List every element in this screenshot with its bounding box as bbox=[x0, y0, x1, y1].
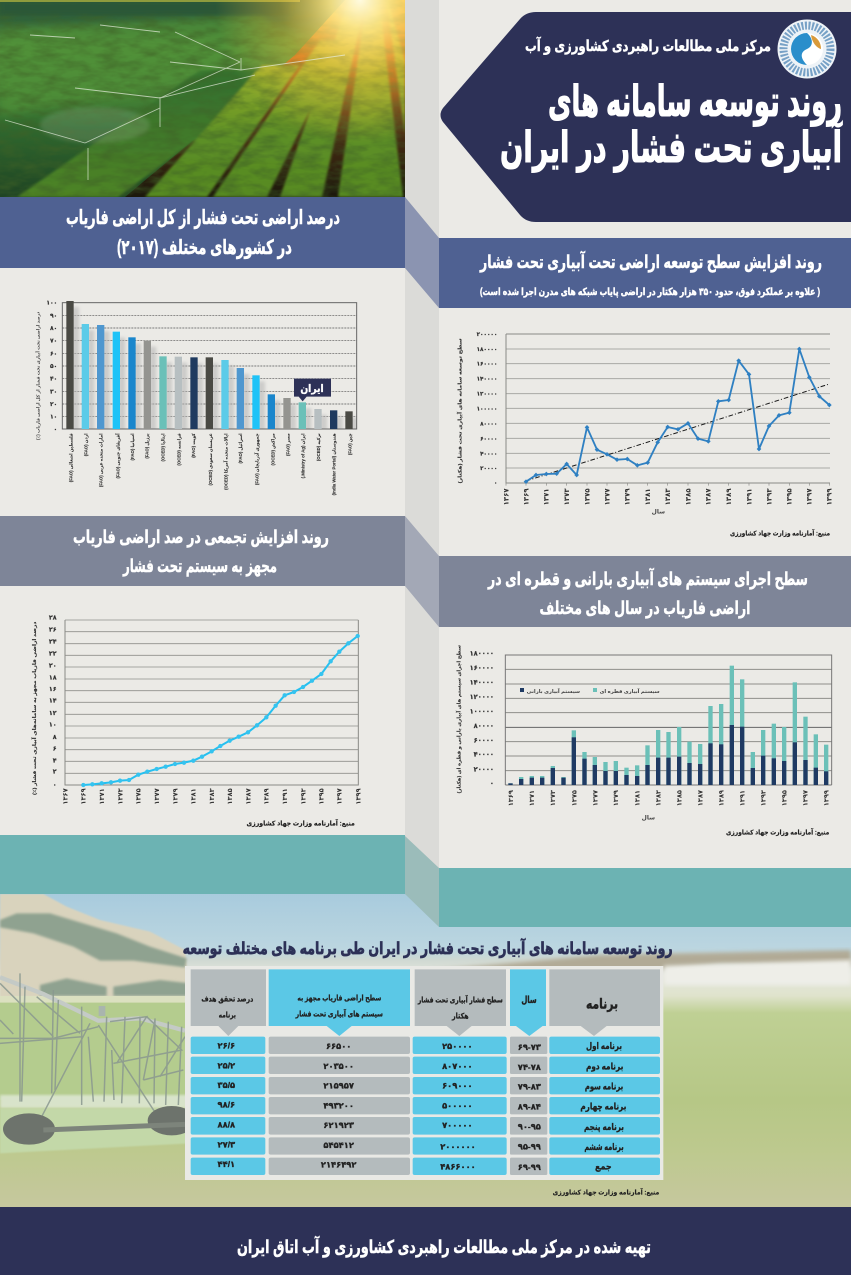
x axis years: ۱۳۷۷ bbox=[154, 788, 161, 805]
row: fourth program: ۸۹-۸۴ bbox=[518, 1101, 541, 1111]
y axis values: ۱۰۰ bbox=[46, 301, 57, 307]
fold connector 2 bbox=[405, 516, 439, 627]
source: منبع: آمارنامه وزارت جهاد کشاورزی bbox=[246, 819, 355, 828]
y axis values: ۱۸۰۰۰۰ bbox=[477, 347, 497, 353]
country labels: مراکش (OCED) bbox=[271, 433, 276, 465]
x axis years: ۱۳۶۹ bbox=[523, 488, 530, 505]
x axis years: ۱۳۹۷ bbox=[803, 790, 810, 806]
header: pressurized area bbox=[415, 969, 506, 1036]
x axis years: ۱۳۹۹ bbox=[356, 788, 363, 805]
heading: share of pressurized land by country line 2: در کشورهای مختلف (۲۰۱۷) bbox=[117, 237, 292, 259]
fold connector 1 bbox=[405, 197, 439, 308]
country labels: ترکیه (OCED) bbox=[316, 433, 321, 461]
country labels: فلسطین اشغالی (FAO) bbox=[69, 433, 74, 482]
y axis values: ۱۰۰۰۰۰ bbox=[470, 708, 494, 715]
row: fifth program: ۶۲۱۹۲۳ bbox=[323, 1120, 354, 1130]
x axis years: ۱۳۹۳ bbox=[761, 790, 768, 806]
country labels: اردن (FAO) bbox=[83, 433, 88, 456]
row: total: ۴۴/۱ bbox=[218, 1159, 235, 1169]
x axis years: ۱۳۷۳ bbox=[564, 488, 571, 505]
header: achievement: برنامه bbox=[219, 1010, 236, 1019]
row: fifth program: ۸۸/۸ bbox=[218, 1120, 235, 1130]
country labels bbox=[69, 433, 352, 495]
y axis values bbox=[46, 301, 57, 433]
y axis values: ۵۰ bbox=[50, 364, 57, 370]
row: sixth program: ۹۵-۹۹ bbox=[518, 1141, 541, 1151]
row: fifth program: برنامه پنجم bbox=[584, 1122, 624, 1133]
data line bbox=[83, 636, 358, 785]
x axis years: ۱۳۸۳ bbox=[665, 488, 672, 505]
y axis values: ۴۰ bbox=[50, 377, 57, 383]
x axis years: ۱۳۸۱ bbox=[634, 790, 641, 806]
country labels: جمهوری آذربایجان (FAO) bbox=[255, 433, 260, 485]
y axis values: ۲۰ bbox=[49, 663, 57, 670]
x axis title: سال bbox=[642, 814, 655, 821]
header: pressurized area: هکتار bbox=[451, 1011, 469, 1020]
y axis title: درصد اراضی فاریاب مجهز به سامانه‌های آبیاری تحت فشار (٪) bbox=[30, 621, 38, 795]
y axis values: ۱۸۰۰۰۰ bbox=[470, 651, 494, 658]
country labels: چین (FAO) bbox=[347, 433, 352, 455]
left header band 1 bbox=[0, 197, 405, 268]
y axis values: ۰ bbox=[490, 781, 494, 788]
header: achievement: درصد تحقق هدف bbox=[201, 994, 253, 1003]
row: total: ۶۹-۹۹ bbox=[518, 1162, 541, 1172]
header: equipped land: سطح اراضی فاریاب مجهز به bbox=[297, 993, 381, 1002]
header: achievement bbox=[191, 969, 266, 1036]
x axis years: ۱۳۶۷ bbox=[62, 788, 69, 805]
x axis years bbox=[508, 790, 831, 806]
x axis years: ۱۳۷۵ bbox=[584, 488, 591, 505]
right header band 1 bbox=[439, 238, 851, 308]
country labels: ایالات متحده آمریکا (OCED) bbox=[223, 433, 228, 490]
right header band 2 bbox=[439, 556, 851, 627]
row: first program: ۶۹-۷۳ bbox=[518, 1042, 541, 1052]
source: منبع: آمارنامه وزارت جهاد کشاورزی bbox=[726, 827, 829, 836]
y axis values: ۱۴۰۰۰۰ bbox=[477, 377, 497, 383]
row: second program: ۷۴-۷۸ bbox=[518, 1062, 541, 1072]
x axis years: ۱۳۹۵ bbox=[319, 788, 326, 805]
header: program: برنامه bbox=[586, 996, 618, 1013]
header: equipped land bbox=[269, 969, 410, 1036]
right teal band bbox=[439, 868, 851, 927]
x axis years: ۱۳۷۱ bbox=[99, 788, 106, 805]
Iran callout: ایران bbox=[300, 383, 324, 395]
row: second program: ۲۰۳۵۰۰ bbox=[323, 1061, 354, 1071]
row: first program: ۲۵۰۰۰۰ bbox=[442, 1041, 473, 1051]
y axis values: ۳۰ bbox=[50, 388, 57, 395]
y axis values: ۴ bbox=[53, 757, 57, 764]
country labels: کویت (FAO) bbox=[191, 433, 196, 458]
y axis values: ۰ bbox=[53, 781, 57, 788]
y axis values: ۶ bbox=[53, 746, 57, 753]
y axis values: ۲۰ bbox=[50, 402, 57, 408]
x axis years: ۱۳۸۵ bbox=[227, 788, 234, 805]
row: sixth program: ۵۴۵۴۱۲ bbox=[323, 1140, 354, 1150]
header: year bbox=[510, 969, 546, 1036]
footer text: تهیه شده در مرکز ملی مطالعات راهبردی کشاورزی و آب اتاق ایران bbox=[237, 1235, 651, 1258]
gutter between columns bbox=[405, 0, 439, 894]
legend: سیستم آبیاری قطره ای bbox=[600, 687, 660, 695]
heading: sprinkler and drip line 2: اراضی فاریاب در سال های مختلف bbox=[540, 598, 750, 618]
y axis values: ۱۸ bbox=[49, 674, 57, 681]
y axis values: ۶۰۰۰۰ bbox=[474, 737, 494, 744]
y axis values: ۱۶۰۰۰۰ bbox=[470, 665, 494, 672]
row: first program: ۲۶/۶ bbox=[218, 1040, 235, 1050]
row: second program: ۲۵/۲ bbox=[218, 1060, 235, 1070]
trend line bbox=[526, 384, 829, 481]
hillside and forest bbox=[0, 894, 190, 1153]
row: third program: ۳۵/۵ bbox=[218, 1080, 235, 1090]
x axis years: ۱۳۸۳ bbox=[209, 788, 216, 805]
x axis years: ۱۳۸۱ bbox=[191, 788, 198, 805]
y axis title: سطح توسعه سامانه های آبیاری تحت فشار (هکتار) bbox=[455, 338, 463, 483]
header: pressurized area: سطح فشار آبیاری تحت فشار bbox=[417, 994, 503, 1004]
row: first program: برنامه اول bbox=[586, 1041, 622, 1052]
footer bbox=[0, 1207, 851, 1275]
x axis years bbox=[503, 488, 834, 505]
x axis years: ۱۳۹۱ bbox=[739, 790, 746, 806]
x axis years: ۱۳۷۳ bbox=[550, 790, 557, 806]
y axis values: ۱۲۰۰۰۰ bbox=[470, 694, 494, 701]
left teal band bbox=[0, 835, 405, 894]
legend bbox=[520, 687, 660, 695]
legend: سیستم آبیاری بارانی bbox=[527, 687, 580, 695]
row: first program bbox=[191, 1037, 660, 1054]
x axis years: ۱۳۹۱ bbox=[746, 488, 753, 505]
x axis years: ۱۳۷۳ bbox=[117, 788, 124, 805]
line chart: cumulative percent of irrigated land bbox=[30, 615, 363, 828]
row: fourth program: ۹۸/۶ bbox=[218, 1100, 235, 1110]
row: fourth program: برنامه چهارم bbox=[580, 1102, 626, 1113]
Iran callout bbox=[294, 379, 331, 401]
y axis values: ۲۶ bbox=[49, 627, 57, 634]
x axis years: ۱۳۸۹ bbox=[726, 488, 733, 505]
logo bbox=[778, 20, 836, 78]
y axis values bbox=[49, 615, 57, 788]
x axis years: ۱۳۸۷ bbox=[245, 788, 252, 805]
sub heading note: ( علاوه بر عملکرد فوق، حدود ۳۵۰ هزار هکتار در اراضی پایاب شبکه های مدرن اجرا شده است) bbox=[480, 287, 820, 298]
source: منبع: آمارنامه وزارت جهاد کشاورزی bbox=[730, 528, 830, 537]
x axis years: ۱۳۷۷ bbox=[592, 790, 599, 806]
header: program bbox=[549, 969, 660, 1036]
row: third program: برنامه سوم bbox=[585, 1081, 623, 1092]
y axis values: ۱۰ bbox=[49, 722, 57, 729]
table background bbox=[185, 966, 663, 1180]
y axis title: سطح اجرای سیستم های آبیاری بارانی و قطره ای (هکتار) bbox=[455, 645, 463, 793]
x axis years bbox=[62, 788, 363, 805]
heading: cumulative increase line 1: روند افزایش تجمعی در صد اراضی فاریاب bbox=[73, 527, 329, 548]
row: total: ۴۸۶۶۰۰۰ bbox=[440, 1162, 476, 1172]
row: third program bbox=[191, 1077, 660, 1094]
row: third program: ۲۱۵۹۵۷ bbox=[323, 1081, 354, 1091]
row: sixth program: برنامه ششم bbox=[584, 1142, 624, 1153]
row: fifth program: ۷۰۰۰۰۰ bbox=[442, 1120, 473, 1130]
row: second program: برنامه دوم bbox=[586, 1062, 623, 1073]
x axis years: ۱۳۶۷ bbox=[503, 488, 510, 505]
x axis years: ۱۳۹۹ bbox=[827, 488, 834, 505]
x axis years: ۱۳۸۵ bbox=[676, 790, 683, 806]
y axis title: درصد اراضی تحت آبیاری تحت فشار از کل اراضی فاریاب (٪) bbox=[35, 311, 40, 440]
row: fifth program: ۹۰-۹۵ bbox=[518, 1121, 541, 1131]
y axis values: ۲۲ bbox=[49, 650, 57, 657]
country labels: اسرائیل (FAO) bbox=[238, 433, 243, 464]
x axis years: ۱۳۸۳ bbox=[655, 790, 662, 806]
pivot irrigation structure bbox=[0, 973, 196, 1145]
sprinkler irrigation series bbox=[508, 725, 828, 785]
x axis years: ۱۳۸۵ bbox=[685, 488, 692, 505]
x axis years: ۱۳۹۷ bbox=[337, 788, 344, 805]
y axis values: ۰ bbox=[54, 427, 57, 433]
y axis values: ۷۰ bbox=[50, 339, 57, 345]
header: year: سال bbox=[521, 995, 537, 1006]
row: sixth program: ۲۰۰۰۰۰۰ bbox=[440, 1141, 476, 1151]
x axis years: ۱۳۷۹ bbox=[625, 488, 632, 505]
y axis values: ۱۲۰۰۰۰ bbox=[477, 392, 497, 398]
bars bbox=[66, 301, 353, 429]
country labels: عربستان سعودی (OCED) bbox=[208, 433, 213, 486]
country labels: برزیل (FAO) bbox=[145, 433, 150, 459]
y axis values: ۸۰ bbox=[50, 326, 57, 332]
x axis years: ۱۳۸۷ bbox=[697, 790, 704, 806]
country labels: هندوستان (India Water Portal) bbox=[331, 433, 336, 495]
data line bbox=[526, 349, 829, 482]
heading: share of pressurized land by country line 1: درصد اراضی تحت فشار از کل اراضی فاریاب bbox=[66, 207, 340, 229]
drip irrigation series bbox=[508, 666, 828, 785]
x axis years: ۱۳۶۹ bbox=[81, 788, 88, 805]
x axis years: ۱۳۷۹ bbox=[613, 790, 620, 806]
title banner bbox=[440, 12, 851, 222]
x axis years: ۱۳۸۷ bbox=[706, 488, 713, 505]
row: first program: ۶۶۵۰۰ bbox=[326, 1041, 351, 1051]
photo: sprinkler irrigation field at sunset bbox=[0, 0, 405, 197]
country labels: ایران (Ministry of Ag.) bbox=[301, 433, 306, 478]
x axis years: ۱۳۹۹ bbox=[824, 790, 831, 806]
y axis values: ۲۰۰۰۰ bbox=[480, 466, 497, 472]
row: second program bbox=[191, 1057, 660, 1074]
row: fourth program: ۵۰۰۰۰۰ bbox=[442, 1100, 473, 1110]
table section bbox=[183, 937, 673, 1196]
left header band 2 bbox=[0, 516, 405, 586]
y axis values: ۱۲ bbox=[49, 710, 57, 717]
y axis values: ۱۰ bbox=[50, 415, 57, 421]
x axis years: ۱۳۹۷ bbox=[807, 488, 814, 505]
y axis values bbox=[477, 332, 497, 486]
y axis values: ۶۰ bbox=[50, 351, 57, 357]
y axis values: ۸۰۰۰۰ bbox=[474, 723, 494, 730]
y axis values: ۲۰۰۰۰۰ bbox=[477, 332, 497, 338]
y axis values: ۲۰۰۰۰ bbox=[474, 766, 494, 773]
row: total: ۲۱۴۶۴۹۲ bbox=[321, 1160, 356, 1170]
table title: روند توسعه سامانه های آبیاری تحت فشار در ایران طی برنامه های مختلف توسعه bbox=[183, 937, 673, 959]
x axis years: ۱۳۹۵ bbox=[782, 790, 789, 806]
country labels: فرانسه (OCED) bbox=[176, 433, 181, 466]
y axis values: ۴۰۰۰۰ bbox=[480, 451, 497, 457]
header: equipped land: سیستم های آبیاری تحت فشار bbox=[295, 1008, 383, 1018]
x axis years: ۱۳۹۱ bbox=[282, 788, 289, 805]
country labels: اسپانیا (FAO) bbox=[130, 433, 135, 460]
country labels: ایتالیا (OCED) bbox=[161, 433, 166, 461]
row: total: جمع bbox=[595, 1161, 612, 1172]
bar chart: pressurized share by country bbox=[35, 301, 358, 495]
x axis years: ۱۳۹۳ bbox=[300, 788, 307, 805]
y axis values: ۰ bbox=[494, 480, 497, 486]
row: second program: ۸۰۷۰۰۰ bbox=[442, 1061, 473, 1071]
y axis values: ۱۶ bbox=[49, 686, 57, 693]
x axis years: ۱۳۷۱ bbox=[529, 790, 536, 806]
source: منبع: آمارنامه وزارت جهاد کشاورزی bbox=[553, 1187, 659, 1196]
y axis values: ۲ bbox=[53, 768, 57, 775]
y axis values: ۲۴ bbox=[49, 639, 57, 646]
country labels: امارات متحده عربی (FAO) bbox=[99, 433, 104, 487]
row: sixth program bbox=[191, 1137, 660, 1155]
x axis years: ۱۳۷۵ bbox=[571, 790, 578, 806]
x axis title: سال bbox=[652, 509, 665, 516]
x axis years: ۱۳۸۱ bbox=[645, 488, 652, 505]
organization name: مرکز ملی مطالعات راهبردی کشاورزی و آب bbox=[525, 37, 771, 55]
row: third program: ۷۹-۸۳ bbox=[518, 1082, 541, 1092]
x axis years: ۱۳۷۵ bbox=[136, 788, 143, 805]
y axis values: ۱۴۰۰۰۰ bbox=[470, 680, 494, 687]
x axis years: ۱۳۹۵ bbox=[787, 488, 794, 505]
line chart: developed pressurized area per year bbox=[455, 332, 834, 537]
y axis values: ۲۸ bbox=[49, 615, 57, 622]
row: fourth program bbox=[191, 1097, 660, 1114]
x axis years: ۱۳۷۱ bbox=[544, 488, 551, 505]
y axis values: ۹۰ bbox=[50, 313, 57, 319]
x axis years: ۱۳۸۹ bbox=[264, 788, 271, 805]
country labels: آفریقای جنوبی (FAO) bbox=[115, 433, 120, 478]
x axis years: ۱۳۸۹ bbox=[718, 790, 725, 806]
y axis values: ۶۰۰۰۰ bbox=[480, 436, 497, 442]
y axis values: ۱۴ bbox=[49, 698, 57, 705]
row: third program: ۶۰۹۰۰۰ bbox=[442, 1081, 473, 1091]
y axis values: ۱۰۰۰۰۰ bbox=[477, 406, 497, 412]
row: sixth program: ۲۷/۳ bbox=[218, 1139, 235, 1149]
x axis years: ۱۳۹۳ bbox=[766, 488, 773, 505]
stacked bar chart: sprinkler and drip area bbox=[455, 645, 832, 836]
y axis values bbox=[470, 651, 494, 788]
row: total bbox=[191, 1158, 660, 1175]
teal fold connector bbox=[405, 836, 439, 927]
y axis values: ۸۰۰۰۰ bbox=[480, 421, 497, 427]
x axis years: ۱۳۶۹ bbox=[508, 790, 515, 806]
row: fifth program bbox=[191, 1117, 660, 1135]
y axis values: ۸ bbox=[53, 734, 57, 741]
x axis years: ۱۳۷۷ bbox=[604, 488, 611, 505]
y axis values: ۱۶۰۰۰۰ bbox=[477, 362, 497, 368]
x axis years: ۱۳۷۹ bbox=[172, 788, 179, 805]
y axis values: ۴۰۰۰۰ bbox=[474, 752, 494, 759]
landscape photo: center pivot irrigation bbox=[0, 894, 851, 1207]
country labels: مصر (FAO) bbox=[285, 433, 290, 456]
row: fourth program: ۴۹۳۲۰۰ bbox=[323, 1100, 354, 1110]
heading: cumulative increase line 2: مجهز به سیستم تحت فشار bbox=[122, 556, 277, 577]
